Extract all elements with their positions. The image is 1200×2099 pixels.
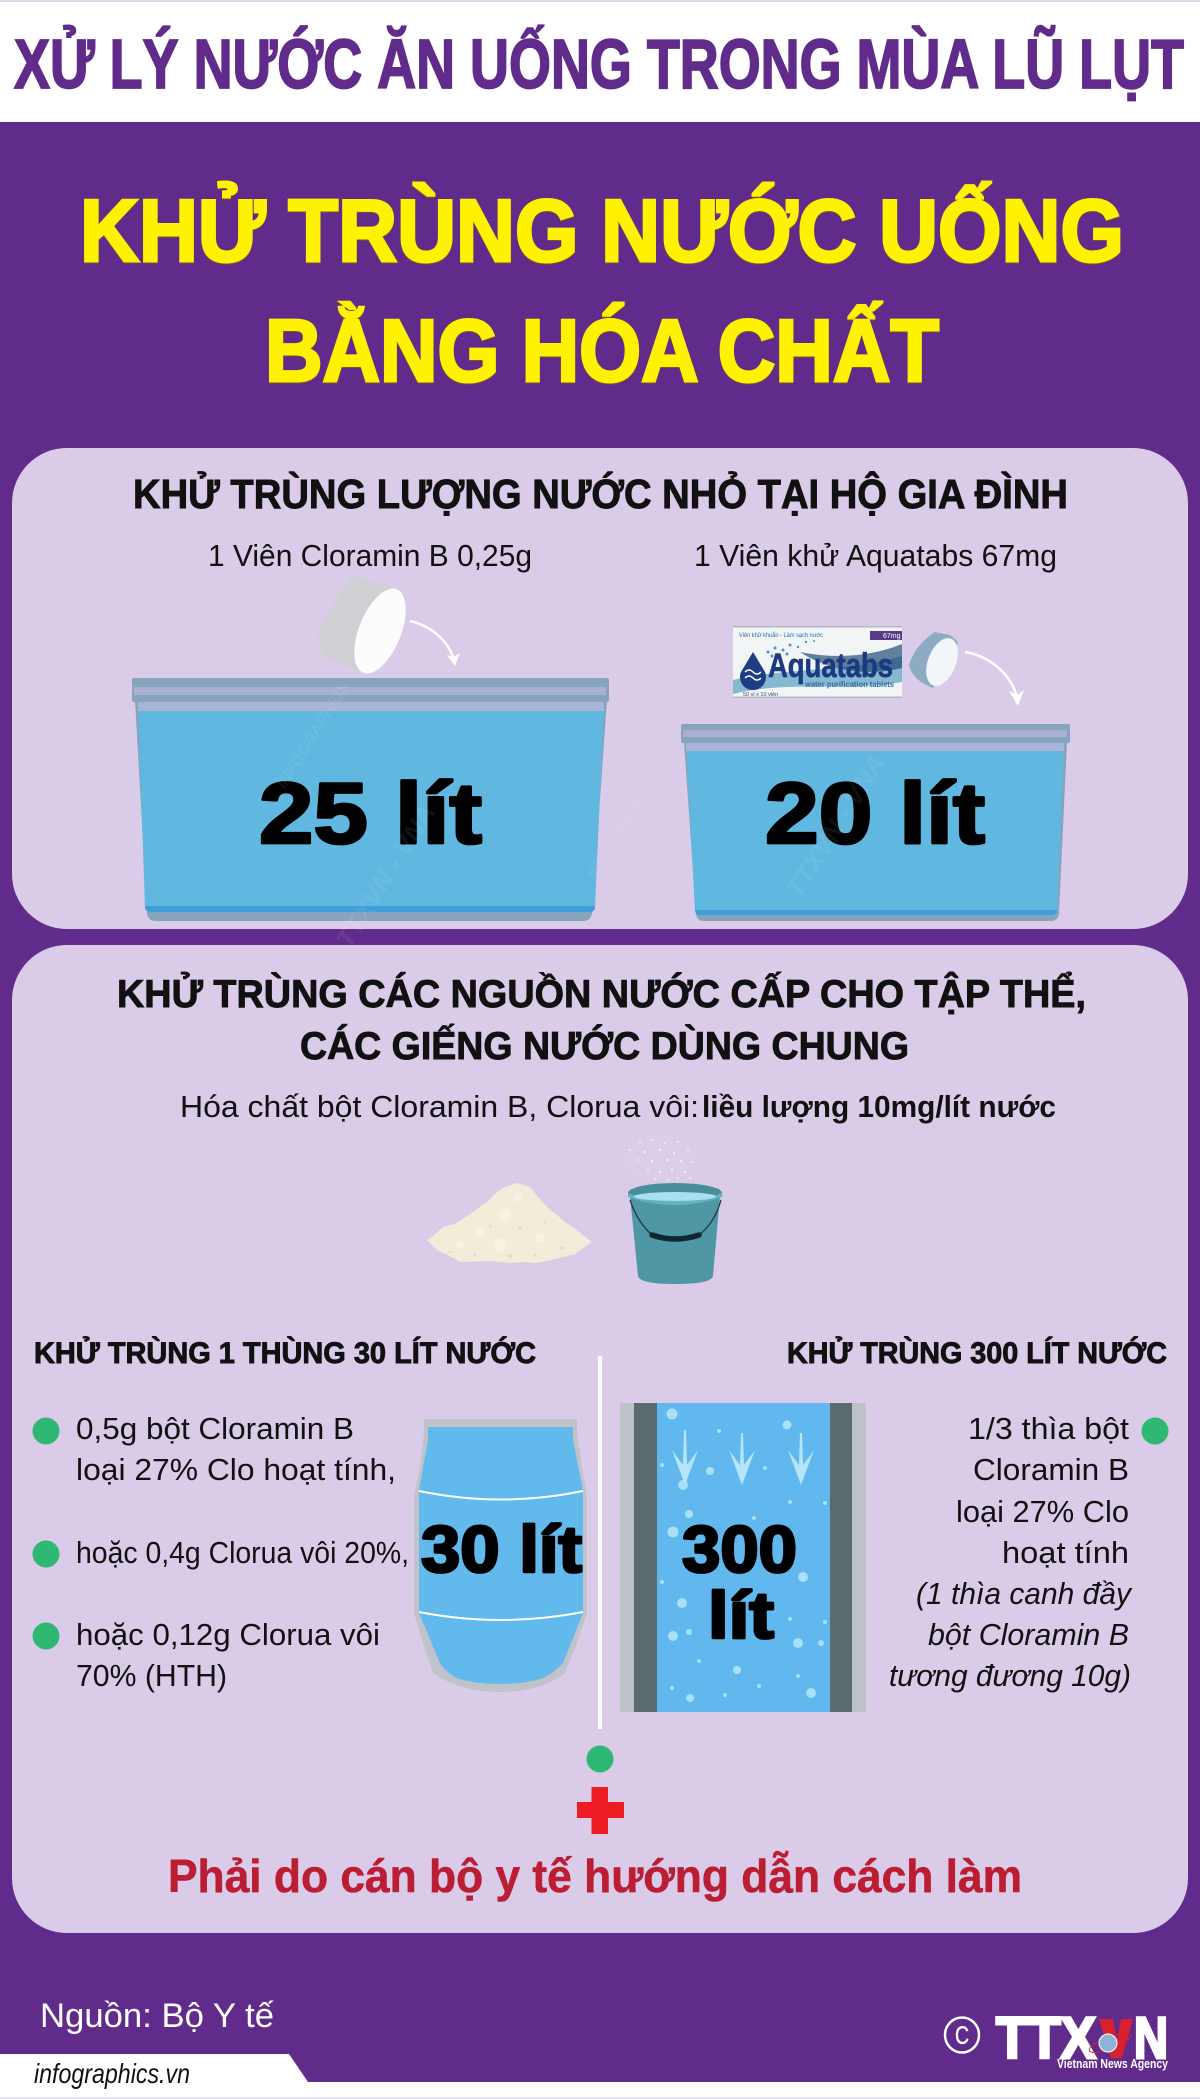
bullet: 0,5g: 0,5g bột Cloramin B [76,1411,354,1446]
panel: household disinfection [12,448,1188,953]
logo: TTXVN [945,2006,1169,2071]
divider [598,1356,602,1729]
dosage line [180,1089,1056,1124]
label: Cloramin B tablet: 1 Viên Cloramin B 0,25g [208,538,532,573]
arrows: water flow [672,1430,814,1485]
panel heading: KHỬ TRÙNG CÁC NGUỒN NƯỚC CẤP CHO TẬP THỂ, [117,971,1086,1016]
panel heading: CÁC GIẾNG NƯỚC DÙNG CHUNG [300,1024,909,1068]
main heading: KHỬ TRÙNG NƯỚC UỐNG [80,181,1124,280]
tank: 20 litres [681,724,1070,921]
box: Aquatabs package: Viên khử khuẩn - Làm sạch nước [739,631,824,639]
value: 20 lít: 20 lít [765,766,985,862]
panel heading [117,971,1086,1068]
top title band [0,0,1200,122]
bullet: 1/3 spoon: hoạt tính [1002,1535,1129,1570]
bullet: 1/3 spoon [956,1411,1168,1570]
note: spoon equivalent: tương đương 10g) [889,1658,1131,1693]
source: Nguồn: Bộ Y tế [40,1997,274,2035]
bullet: 0,5g [32,1411,396,1487]
column: 30 litres [32,1336,587,1693]
dosage line: Hóa chất bột Cloramin B, Clorua vôi: [180,1089,699,1124]
logo: TTXVN: N [1134,2006,1168,2071]
tank: 25 litres [132,678,609,921]
icon: 30 litre barrel [414,1419,587,1692]
value: 30 lít: 30 lít [421,1512,582,1586]
box: Aquatabs package [733,626,902,698]
warning text: Phải do cán bộ y tế hướng dẫn cách làm [168,1850,1022,1902]
main heading: BẰNG HÓA CHẤT [265,301,939,400]
logo: TTXVN: TTX [996,2006,1096,2071]
logo: TTXVN: Vietnam News Agency [1057,2056,1169,2071]
spray particles [624,1136,696,1181]
footer band [0,2054,1200,2099]
watermarks: TTXVN - VNA [780,749,892,903]
bubbles [660,1408,827,1702]
column heading: KHỬ TRÙNG 1 THÙNG 30 LÍT NƯỚC [34,1336,536,1370]
connector dot [586,1746,614,1772]
arrow: tablet into tank 25 [410,621,460,666]
watermarks: TTXVN - VNA [330,799,442,953]
value: 300 lít: lít [708,1578,774,1652]
column: 300 litres [620,1336,1168,1712]
bullet: 0,12g [32,1617,380,1693]
note: spoon equivalent [889,1576,1133,1693]
dosage line: liều lượng 10mg/lít nước [702,1089,1056,1124]
bullet: 1/3 spoon: loại 27% Clo [956,1494,1129,1529]
website: infographics.vn [34,2058,190,2089]
box: Aquatabs package: 50 vỉ x 10 viên [743,691,778,698]
note: spoon equivalent: bột Cloramin B [928,1617,1129,1652]
icon: 300 litre tank [620,1403,866,1712]
note: spoon equivalent: (1 thìa canh đầy [916,1576,1133,1611]
value: 300 lít: 300 [682,1512,797,1586]
bullet: 1/3 spoon: 1/3 thìa bột [968,1411,1129,1446]
panel heading: KHỬ TRÙNG LƯỢNG NƯỚC NHỎ TẠI HỘ GIA ĐÌNH [133,471,1068,517]
column heading: KHỬ TRÙNG 300 LÍT NƯỚC [787,1336,1167,1370]
panel: collective water sources [12,945,1188,1933]
value: 300 lít [682,1512,797,1652]
bullet: 0,12g: hoặc 0,12g Clorua vôi [76,1617,380,1652]
value: 25 lít: 25 lít [259,766,482,862]
watermarks: INFOGRAPHICS [584,769,664,882]
label: Aquatabs tablet: 1 Viên khử Aquatabs 67mg [694,538,1057,573]
bullet: 0,5g: loại 27% Clo hoạt tính, [76,1452,396,1487]
bullet: 0,4g: hoặc 0,4g Clorua vôi 20%, [76,1535,409,1570]
box: Aquatabs package: water purification tablets [804,679,894,689]
bullet: 0,12g: 70% (HTH) [76,1658,227,1693]
copyright symbol: C [955,2022,969,2050]
copyright symbol [945,2018,979,2052]
box: Aquatabs package: 67mg [883,633,901,640]
icon: bucket with spray [624,1136,722,1284]
icon: red cross [577,1787,624,1834]
main heading [80,181,1124,400]
icon: Cloramin tablet [317,576,416,681]
bullet: 1/3 spoon: Cloramin B [973,1452,1129,1487]
arrow: tablet into tank 20 [965,652,1024,706]
icon: Aquatabs tablet [909,632,964,690]
icon: powder pile [427,1183,592,1263]
watermarks [274,679,892,953]
watermarks: INFOGRAPHICS [274,679,354,792]
box: Aquatabs package: Aquatabs [768,647,893,685]
